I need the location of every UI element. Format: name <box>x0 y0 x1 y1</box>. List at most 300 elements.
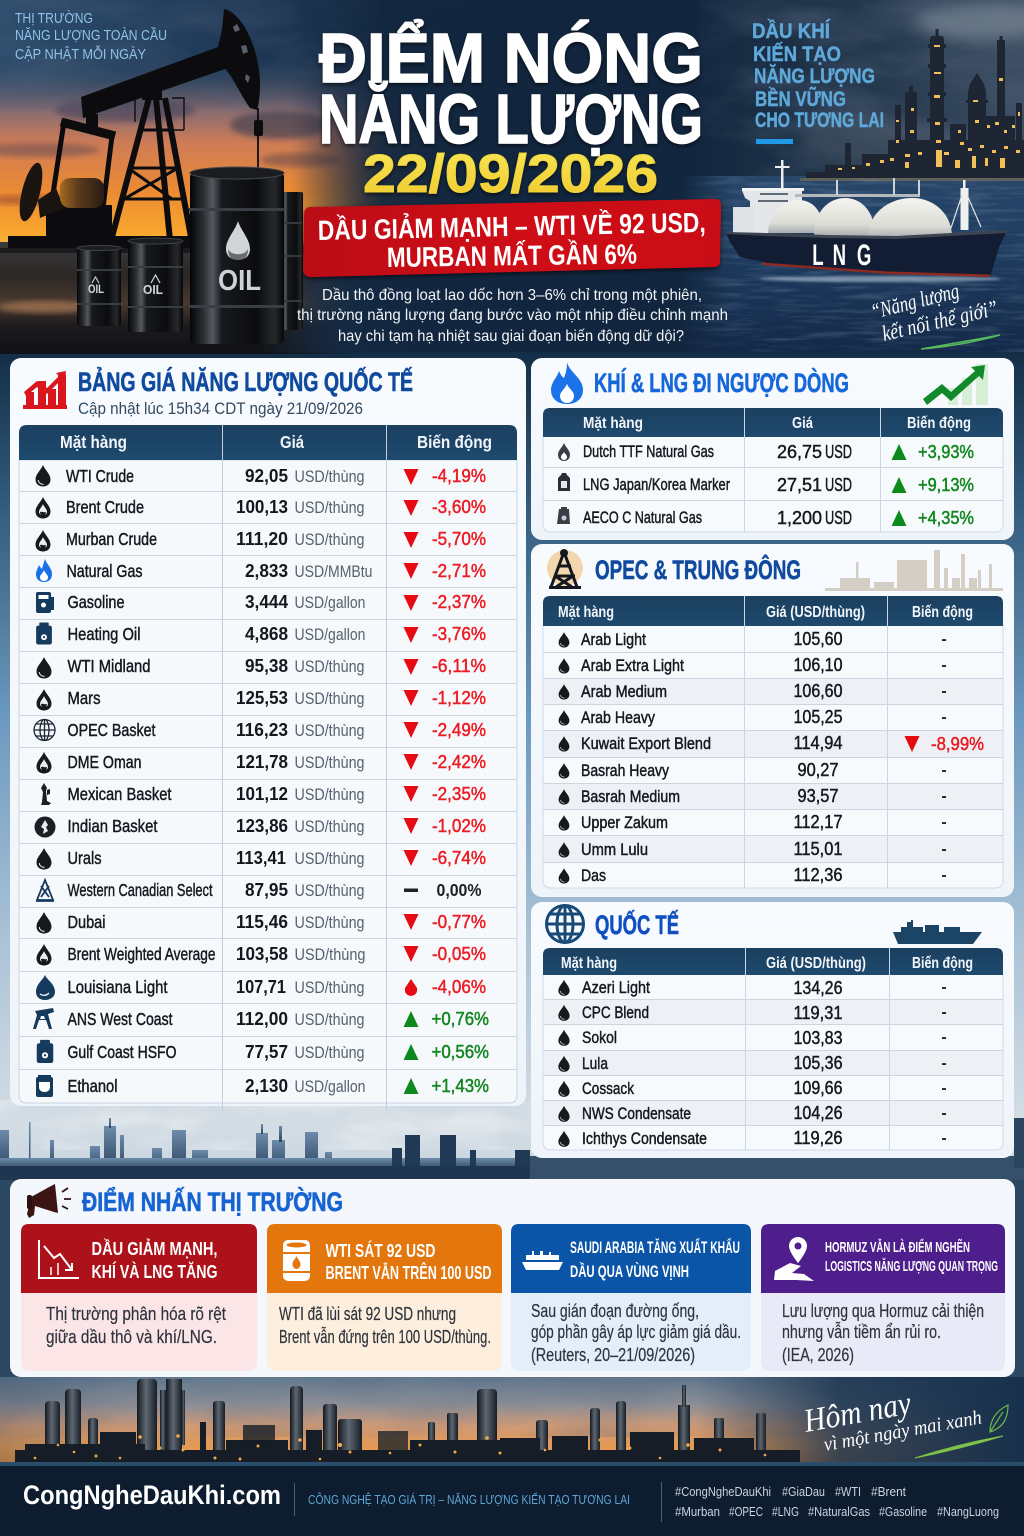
row: Arab Heavy: 105,25 <box>794 706 842 727</box>
top right slogan: CHO TƯƠNG LAI <box>755 109 884 132</box>
hero banner <box>0 0 1024 354</box>
card body <box>782 1301 984 1365</box>
panel: gas and LNG <box>531 358 1014 540</box>
row: Urals: -6,74% <box>432 847 486 868</box>
card body: nhưng vẫn tiềm ẩn rủi ro. <box>782 1321 941 1342</box>
card: WTI near 92 <box>267 1224 502 1371</box>
row: LNG Japan/Korea Marker: 27,51 <box>777 474 822 495</box>
icon: map pin and road <box>774 1237 814 1281</box>
row: Mexican Basket: Mexican Basket <box>68 784 172 804</box>
top left tagline <box>15 10 167 63</box>
row: Arab Medium: 106,60 <box>794 680 842 701</box>
row: WTI Midland: 95,38 <box>245 655 288 676</box>
card title: BRENT VẪN TRÊN 100 USD <box>326 1262 492 1283</box>
row: Brent Weighted Average: Brent Weighted Average <box>68 944 216 964</box>
table header row <box>60 432 492 452</box>
icon: blue flame <box>551 362 583 404</box>
row: Arab Medium: - <box>941 683 947 700</box>
OPEC table header: Biến động <box>912 604 973 621</box>
icon: globe <box>546 906 584 942</box>
heading: price board: BẢNG GIÁ NĂNG LƯỢNG QUỐC TẾ <box>78 365 413 397</box>
row: Brent Crude: USD/thùng <box>294 499 364 517</box>
row: Indian Basket: 123,86 <box>236 815 288 836</box>
row: NWS Condensate: 104,26 <box>794 1102 842 1123</box>
oil barrel medium: OIL <box>143 282 163 297</box>
icon: container ship <box>893 920 982 944</box>
icon: green rising arrow <box>923 364 988 405</box>
LNG carrier ship: LNG <box>812 239 871 272</box>
row: Gulf Coast HSFO: Gulf Coast HSFO <box>68 1042 176 1062</box>
row: Brent Weighted Average: 103,58 <box>236 943 288 964</box>
row: Dutch TTF Natural Gas: USD <box>825 441 852 462</box>
row: Cossack: Cossack <box>582 1080 635 1098</box>
row: NWS Condensate: - <box>941 1105 947 1122</box>
row: WTI Crude: WTI Crude <box>66 466 134 486</box>
quote <box>868 278 1000 349</box>
row: Ichthys Condensate: Ichthys Condensate <box>582 1130 707 1148</box>
row: WTI Midland: WTI Midland <box>68 656 150 676</box>
row: Brent Weighted Average <box>36 943 486 966</box>
row: AECO C Natural Gas <box>557 507 974 528</box>
row: Arab Medium <box>559 680 947 701</box>
row: Arab Extra Light: Arab Extra Light <box>581 657 684 675</box>
refinery on right <box>800 29 1024 181</box>
row: NWS Condensate: NWS Condensate <box>582 1105 691 1123</box>
row: Gasoline: -2,37% <box>432 591 486 612</box>
row: Brent Crude: Brent Crude <box>66 497 144 517</box>
panel: OPEC and Middle East <box>531 544 1014 897</box>
row: Brent Weighted Average: -0,05% <box>432 943 486 964</box>
card body: (Reuters, 20–21/09/2026) <box>531 1345 695 1365</box>
row: Basrah Medium: - <box>941 788 947 805</box>
row: Umm Lulu: - <box>941 841 947 858</box>
skyline watermark <box>825 550 1003 591</box>
card: Saudi exports <box>511 1224 751 1371</box>
row: LNG Japan/Korea Marker: +9,13% <box>918 474 974 495</box>
row: Indian Basket: Indian Basket <box>68 816 158 836</box>
main title <box>319 18 703 158</box>
card title: KHÍ VÀ LNG TĂNG <box>92 1261 218 1282</box>
hero intro paragraph: Dầu thô đồng loạt lao dốc hơn 3–6% chỉ trong một phiên, <box>322 287 702 304</box>
card: oil falls <box>21 1224 257 1371</box>
row: Gasoline: Gasoline <box>68 592 124 612</box>
card body <box>279 1304 491 1347</box>
row: Mexican Basket <box>41 783 486 805</box>
row: ANS West Coast: ANS West Coast <box>68 1009 173 1029</box>
row: Lula: Lula <box>582 1055 609 1073</box>
card title <box>326 1240 492 1283</box>
row: Ethanol <box>36 1075 489 1097</box>
row: Mars: 125,53 <box>236 687 288 708</box>
row: Azeri Light: 134,26 <box>794 977 842 998</box>
row: Western Canadian Select: USD/thùng <box>294 882 364 900</box>
row: Gasoline <box>36 591 486 613</box>
row: Azeri Light: Azeri Light <box>582 979 650 997</box>
row: Brent Crude: -3,60% <box>432 496 486 517</box>
row: Ichthys Condensate <box>558 1127 947 1148</box>
row: Das: Das <box>581 867 606 885</box>
row: Indian Basket: USD/thùng <box>294 818 364 836</box>
row: ANS West Coast <box>33 1008 489 1029</box>
LNG carrier ship <box>726 160 1007 282</box>
red headline banner <box>303 199 721 277</box>
card: Hormuz <box>761 1224 1005 1371</box>
top left tagline: NĂNG LƯỢNG TOÀN CẦU <box>15 27 167 44</box>
card body <box>46 1304 226 1347</box>
row: Dubai: USD/thùng <box>294 914 364 932</box>
card title: DẦU GIẢM MẠNH, <box>92 1238 218 1259</box>
row: Natural Gas: 2,833 <box>245 560 288 581</box>
pumpjack silhouette <box>0 9 263 253</box>
row: Natural Gas: USD/MMBtu <box>294 563 372 581</box>
row: Ethanol: +1,43% <box>432 1075 489 1096</box>
row: Heating Oil: -3,76% <box>432 623 486 644</box>
row: Das: 112,36 <box>794 864 842 885</box>
hashtags <box>675 1485 999 1519</box>
row: CPC Blend <box>558 1002 947 1023</box>
oil barrel small: OIL <box>88 282 104 296</box>
card body <box>531 1301 741 1365</box>
OPEC table header <box>558 604 973 621</box>
row: Mars: Mars <box>68 688 101 708</box>
row: OPEC Basket: 116,23 <box>236 719 288 740</box>
heading: gas and LNG: KHÍ & LNG ĐI NGƯỢC DÒNG <box>594 367 849 398</box>
hashtags: #Gasoline <box>879 1505 927 1519</box>
row: DME Oman: USD/thùng <box>294 754 364 772</box>
row: Dubai: -0,77% <box>432 911 486 932</box>
row: Arab Heavy: - <box>941 709 947 726</box>
top left tagline: CẬP NHẬT MỖI NGÀY <box>15 45 146 63</box>
oil barrel large <box>189 167 285 344</box>
panel: international energy price board <box>10 358 526 1110</box>
row: Cossack: 109,66 <box>794 1077 842 1098</box>
row: Western Canadian Select: 0,00% <box>436 880 482 900</box>
row: Brent Crude: 100,13 <box>236 496 288 517</box>
row: Urals: 113,41 <box>236 847 286 868</box>
row: Umm Lulu <box>559 838 947 859</box>
row: WTI Crude <box>36 465 486 486</box>
icon: red rising bar chart <box>23 371 67 409</box>
icon: falling chart <box>39 1240 79 1278</box>
row: WTI Midland <box>36 655 486 678</box>
card title: DẦU QUA VÙNG VỊNH <box>570 1262 689 1281</box>
row: Mexican Basket: -2,35% <box>432 783 486 804</box>
back barrel <box>280 192 303 330</box>
row: Louisiana Light: 107,71 <box>236 976 286 997</box>
row: DME Oman: DME Oman <box>68 752 142 772</box>
OPEC table header: Giá (USD/thùng) <box>766 604 865 621</box>
OPEC table <box>543 596 1003 888</box>
row: Basrah Medium: Basrah Medium <box>581 788 680 806</box>
row: Umm Lulu: 115,01 <box>794 838 842 859</box>
row: AECO C Natural Gas: +4,35% <box>918 507 974 528</box>
table header row: Mặt hàng <box>60 432 127 452</box>
hashtags: #GiaDau <box>782 1485 825 1499</box>
OPEC table header: Mặt hàng <box>558 604 614 621</box>
international table header <box>561 955 973 972</box>
row: Ethanol: 2,130 <box>245 1075 288 1096</box>
row: Urals <box>36 847 486 870</box>
row: Gulf Coast HSFO: +0,56% <box>432 1041 489 1062</box>
main title: NĂNG LƯỢNG <box>319 80 703 158</box>
row: Murban Crude: USD/thùng <box>294 531 364 549</box>
row: Sokol <box>558 1027 947 1048</box>
gas table header: Biến động <box>907 415 971 432</box>
row: Western Canadian Select: Western Canadian Select <box>68 880 213 900</box>
row: Das <box>559 864 947 885</box>
row: Azeri Light <box>558 977 947 998</box>
signature: today for a green tomorrow: Hôm nay <box>800 1386 914 1440</box>
panel: market highlights <box>10 1179 1015 1377</box>
row: Western Canadian Select <box>36 879 482 901</box>
row: OPEC Basket: OPEC Basket <box>68 720 156 740</box>
gas table header <box>583 415 971 432</box>
icon: tanker ship <box>522 1251 563 1270</box>
row: Sokol: - <box>941 1029 947 1046</box>
row: Gasoline: 3,444 <box>245 591 289 612</box>
signature: today for a green tomorrow: vì một ngày mai xanh <box>822 1406 983 1456</box>
row: Indian Basket <box>34 815 486 838</box>
footer <box>0 1466 1024 1536</box>
row: Dubai <box>36 911 486 934</box>
footer tagline: CÔNG NGHỆ TẠO GIÁ TRỊ – NĂNG LƯỢNG KIẾN TẠO TƯƠNG LAI <box>308 1492 630 1507</box>
row: AECO C Natural Gas: USD <box>825 507 852 528</box>
row: Basrah Heavy: Basrah Heavy <box>581 762 670 780</box>
row: WTI Crude: -4,19% <box>432 465 486 486</box>
row: LNG Japan/Korea Marker: USD <box>825 474 852 495</box>
row: Kuwait Export Blend: 114,94 <box>794 732 842 753</box>
row: Natural Gas: -2,71% <box>432 560 486 581</box>
row: Basrah Medium <box>559 785 947 806</box>
site name: CongNgheDauKhi.com <box>23 1480 281 1510</box>
row: WTI Crude: USD/thùng <box>294 468 364 486</box>
row: WTI Midland: USD/thùng <box>294 658 364 676</box>
row: Arab Extra Light <box>559 654 947 675</box>
icon: oil derrick <box>547 549 583 589</box>
row: CPC Blend: 119,31 <box>794 1002 842 1023</box>
table header row: Giá <box>280 432 304 452</box>
row: CPC Blend: CPC Blend <box>582 1004 649 1022</box>
hashtags: #WTI <box>835 1485 861 1499</box>
card title <box>570 1238 740 1281</box>
row: Arab Heavy: Arab Heavy <box>581 709 656 727</box>
row: Basrah Heavy <box>559 759 947 780</box>
row: ANS West Coast: +0,76% <box>432 1008 489 1029</box>
table header row: Biến động <box>417 432 492 452</box>
row: Sokol: Sokol <box>582 1029 617 1047</box>
international table header: Mặt hàng <box>561 955 617 972</box>
row: Kuwait Export Blend <box>559 732 984 754</box>
mid clouds and skyline <box>0 1100 1024 1180</box>
card body: Sau gián đoạn đường ống, <box>531 1301 699 1321</box>
row: Murban Crude: 111,20 <box>236 528 288 549</box>
card body: giữa dầu thô và khí/LNG. <box>46 1327 217 1347</box>
row: Heating Oil: 4,868 <box>245 623 288 644</box>
row: Heating Oil: Heating Oil <box>68 624 140 644</box>
row: Brent Weighted Average: USD/thùng <box>294 946 366 964</box>
row: Arab Extra Light: - <box>941 657 947 674</box>
card title: SAUDI ARABIA TĂNG XUẤT KHẨU <box>570 1238 740 1257</box>
oil barrel medium <box>128 238 183 332</box>
top left tagline: THỊ TRƯỜNG <box>15 10 93 27</box>
row: Louisiana Light: Louisiana Light <box>68 977 168 997</box>
row: Gasoline: USD/gallon <box>294 594 366 612</box>
row: WTI Crude: 92,05 <box>245 465 288 486</box>
mid page background <box>0 340 1024 1190</box>
updated timestamp: Cập nhật lúc 15h34 CDT ngày 21/09/2026 <box>78 399 363 418</box>
hero intro paragraph: thị trường năng lượng đang bước vào một nhịp điều chỉnh mạnh <box>297 307 728 324</box>
hashtags: #CongNgheDauKhi <box>675 1485 771 1499</box>
row: Mars: -1,12% <box>432 687 486 708</box>
main title: ĐIỂM NÓNG <box>319 18 703 97</box>
row: WTI Midland: -6,11% <box>432 655 486 676</box>
date: 22/09/2026 <box>363 144 658 204</box>
row: OPEC Basket: -2,49% <box>432 719 486 740</box>
row: Umm Lulu: Umm Lulu <box>581 841 648 859</box>
card body: Brent vẫn đứng trên 100 USD/thùng. <box>279 1326 491 1347</box>
card title <box>825 1238 998 1275</box>
top right slogan <box>752 20 884 144</box>
hashtags: #Murban <box>675 1505 720 1519</box>
row: Basrah Heavy: 90,27 <box>798 759 838 780</box>
row: DME Oman: 121,78 <box>236 751 288 772</box>
red headline banner: MURBAN MẤT GẦN 6% <box>387 239 637 273</box>
row: Dutch TTF Natural Gas: 26,75 <box>777 441 822 462</box>
row: Kuwait Export Blend: -8,99% <box>931 733 984 754</box>
row: Das: - <box>941 867 947 884</box>
row: Heating Oil <box>36 622 486 644</box>
row: Upper Zakum: - <box>941 814 947 831</box>
row: Arab Medium: Arab Medium <box>581 683 667 701</box>
row: OPEC Basket: USD/thùng <box>294 722 364 740</box>
row: Arab Heavy <box>559 706 947 727</box>
icon: oil barrel <box>283 1240 310 1281</box>
row: DME Oman <box>36 751 486 774</box>
row: Urals: Urals <box>68 848 102 868</box>
gas table <box>543 408 1003 532</box>
row: Dutch TTF Natural Gas: +3,93% <box>918 441 974 462</box>
row: Louisiana Light <box>36 975 486 1000</box>
top right slogan: NĂNG LƯỢNG <box>754 65 875 88</box>
row: Upper Zakum: 112,17 <box>794 811 842 832</box>
row: Upper Zakum: Upper Zakum <box>581 814 668 832</box>
row: Dubai: 115,46 <box>236 911 288 932</box>
red headline banner: DẦU GIẢM MẠNH – WTI VỀ 92 USD, <box>317 206 706 246</box>
row: Lula: - <box>941 1055 947 1072</box>
heading: OPEC: OPEC & TRUNG ĐÔNG <box>595 554 801 585</box>
row: Urals: USD/thùng <box>294 850 364 868</box>
international table header: Biến động <box>912 955 973 972</box>
row: Azeri Light: - <box>941 979 947 996</box>
row: Ethanol: USD/gallon <box>294 1078 366 1096</box>
row: Natural Gas <box>36 559 486 582</box>
row: Mars: USD/thùng <box>294 690 364 708</box>
hero intro paragraph <box>297 287 728 345</box>
row: Lula <box>558 1052 947 1073</box>
row: Cossack: - <box>941 1080 947 1097</box>
row: Mexican Basket: USD/thùng <box>294 786 364 804</box>
row: Arab Light <box>559 628 947 649</box>
top right slogan: BỀN VỮNG <box>755 87 846 111</box>
row: LNG Japan/Korea Marker <box>558 473 974 495</box>
row: Lula: 105,36 <box>794 1052 842 1073</box>
signature: today for a green tomorrow <box>800 1386 1008 1458</box>
card body: Thị trường phân hóa rõ rệt <box>46 1304 226 1324</box>
row: Murban Crude <box>36 528 486 552</box>
gas table header: Mặt hàng <box>583 415 643 432</box>
refinery sunset band <box>0 1377 1024 1466</box>
top right slogan: KIẾN TẠO <box>753 43 841 66</box>
row: Kuwait Export Blend: Kuwait Export Blend <box>581 735 711 753</box>
row: Mexican Basket: 101,12 <box>236 783 288 804</box>
row: AECO C Natural Gas: 1,200 <box>777 507 822 528</box>
row: Murban Crude: -5,70% <box>432 528 486 549</box>
hashtags: #NaturalGas <box>808 1505 870 1519</box>
card title: WTI SÁT 92 USD <box>326 1240 436 1261</box>
hashtags: #LNG <box>772 1505 799 1519</box>
row: Western Canadian Select: 87,95 <box>245 879 288 900</box>
row: Dutch TTF Natural Gas <box>558 441 974 462</box>
heading: international: QUỐC TẾ <box>595 908 679 940</box>
row: AECO C Natural Gas: AECO C Natural Gas <box>583 509 702 527</box>
row: Upper Zakum <box>559 811 947 832</box>
row: Heating Oil: USD/gallon <box>294 626 366 644</box>
row: NWS Condensate <box>558 1102 947 1123</box>
gas table header: Giá <box>792 415 813 432</box>
row: Louisiana Light: -4,06% <box>432 976 486 997</box>
row: Indian Basket: -1,02% <box>432 815 486 836</box>
row: Ichthys Condensate: - <box>941 1130 947 1147</box>
hashtags: #NangLuong <box>937 1505 999 1519</box>
row: Sokol: 103,83 <box>794 1027 842 1048</box>
card body: (IEA, 2026) <box>782 1345 854 1365</box>
row: Natural Gas: Natural Gas <box>66 561 143 581</box>
row: Basrah Heavy: - <box>941 762 947 779</box>
row: Basrah Medium: 93,57 <box>798 785 838 806</box>
row: ANS West Coast: 112,00 <box>236 1008 288 1029</box>
international table header: Giá (USD/thùng) <box>766 955 866 972</box>
hero intro paragraph: hay chi tạm hạ nhiệt sau giai đoạn biến động dữ dội? <box>338 328 684 345</box>
row: Murban Crude: Murban Crude <box>66 529 157 549</box>
row: Arab Extra Light: 106,10 <box>794 654 842 675</box>
row: OPEC Basket <box>34 719 486 740</box>
row: Mars <box>36 687 486 710</box>
row: DME Oman: -2,42% <box>432 751 486 772</box>
row: CPC Blend: - <box>941 1004 947 1021</box>
top right slogan: DẦU KHÍ <box>752 20 831 43</box>
panel: international crudes <box>531 902 1014 1158</box>
card body: góp phần gây áp lực giảm giá dầu. <box>531 1322 741 1342</box>
row: Dutch TTF Natural Gas: Dutch TTF Natural Gas <box>583 443 714 461</box>
hashtags: #Brent <box>871 1485 906 1499</box>
icon: megaphone <box>27 1184 71 1218</box>
oil barrel large: OIL <box>218 265 261 297</box>
international table <box>543 948 1003 1150</box>
row: Brent Crude <box>36 496 486 518</box>
card title <box>92 1238 218 1282</box>
row: Ethanol: Ethanol <box>68 1076 118 1096</box>
quote: “Năng lượng <box>868 278 962 324</box>
heading: highlights: ĐIỂM NHẤN THỊ TRƯỜNG <box>82 1186 343 1217</box>
hashtags: #OPEC <box>729 1505 763 1519</box>
row: Gulf Coast HSFO: USD/thùng <box>294 1044 364 1062</box>
row: Gulf Coast HSFO <box>37 1040 489 1063</box>
row: LNG Japan/Korea Marker: LNG Japan/Korea Marker <box>583 476 730 494</box>
card body: WTI đã lùi sát 92 USD nhưng <box>279 1304 456 1324</box>
row: Cossack <box>558 1077 947 1098</box>
row: Arab Light: Arab Light <box>581 631 646 649</box>
row: Gulf Coast HSFO: 77,57 <box>245 1041 288 1062</box>
